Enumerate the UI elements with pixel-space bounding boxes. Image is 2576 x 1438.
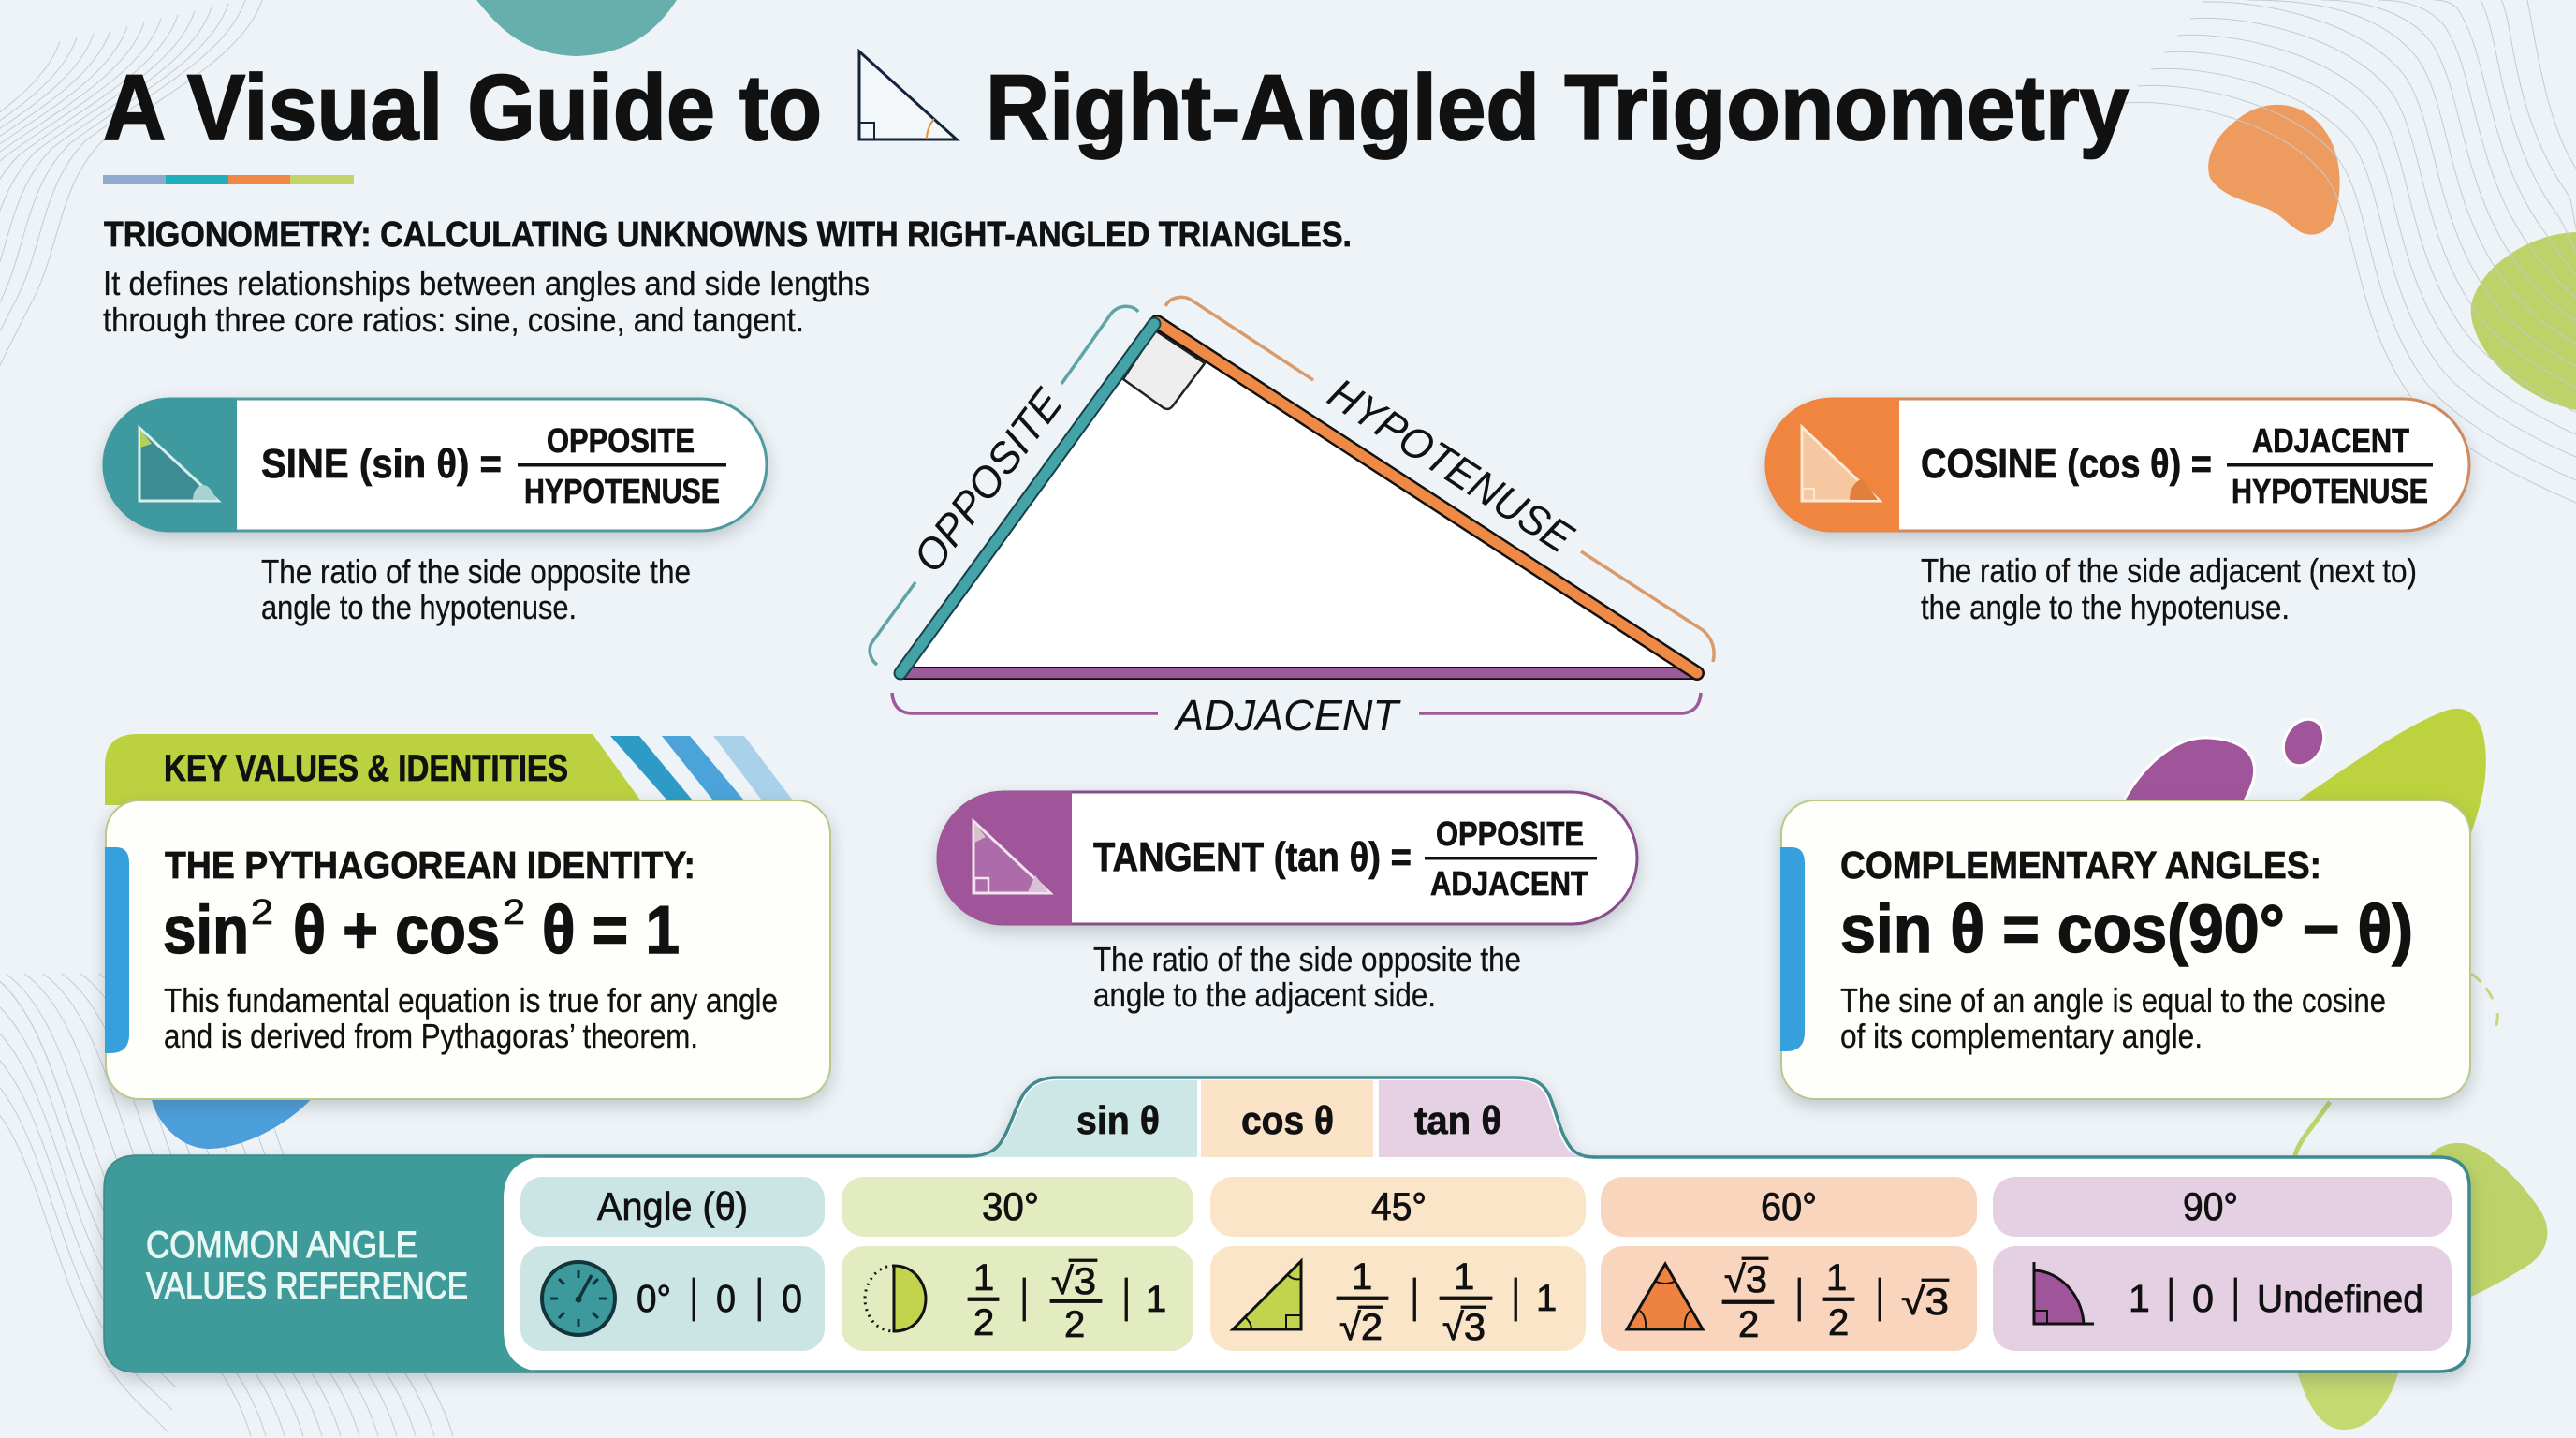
values: 1	[1352, 1256, 1372, 1298]
values: 0	[716, 1277, 736, 1320]
title: A Visual Guide to	[103, 55, 822, 159]
label: opposite: OPPOSITE	[903, 378, 1073, 580]
values: √3	[1051, 1261, 1096, 1302]
sine pill	[102, 398, 767, 532]
tab: cos	[1201, 1080, 1373, 1157]
values: 2	[1064, 1304, 1085, 1345]
values: 0	[782, 1277, 802, 1320]
values	[637, 1277, 802, 1321]
tab: sin	[978, 1080, 1197, 1157]
values: √2	[1339, 1307, 1383, 1348]
sine formula	[261, 421, 726, 510]
identity equation: θ + cos	[293, 893, 500, 968]
values: 2	[1828, 1302, 1849, 1343]
values	[968, 1257, 1166, 1345]
values	[1722, 1257, 1949, 1345]
complementary description: The sine of an angle is equal to the cosine	[1840, 981, 2386, 1020]
complementary description	[1840, 981, 2386, 1055]
column: angle 60: 60°	[1761, 1184, 1817, 1228]
ratio tabs	[978, 1080, 1587, 1157]
title colour bar	[103, 175, 354, 184]
cosine formula: HYPOTENUSE	[2232, 472, 2428, 510]
values: 1	[973, 1257, 994, 1299]
header tab	[105, 734, 644, 824]
tab: sin: sin θ	[1076, 1098, 1160, 1142]
complementary description: of its complementary angle.	[1840, 1017, 2203, 1055]
icon: half circle	[865, 1266, 926, 1331]
values: 0	[2192, 1277, 2214, 1320]
icon: gauge	[542, 1262, 615, 1335]
blue blob under identity card	[151, 1095, 315, 1149]
bracket: hypotenuse	[1165, 297, 1714, 662]
identity heading: THE PYTHAGOREAN IDENTITY:	[165, 844, 695, 887]
sine description: The ratio of the side opposite the	[261, 552, 691, 591]
label: hypotenuse: HYPOTENUSE	[1320, 368, 1583, 563]
values: 2	[973, 1302, 994, 1343]
icon: quarter circle	[2034, 1262, 2094, 1324]
values: Undefined	[2257, 1277, 2423, 1320]
sine formula: SINE (sin θ) =	[261, 441, 502, 487]
column: angle 30	[842, 1177, 1193, 1351]
column: angle 45: 45°	[1371, 1184, 1427, 1228]
values: 1	[2129, 1277, 2150, 1320]
icon: tangent triangle	[973, 821, 1050, 893]
triangle	[900, 322, 1697, 673]
cosine description: the angle to the hypotenuse.	[1921, 588, 2290, 626]
bracket: adjacent	[892, 693, 1701, 713]
icon: 45 degree triangle	[1233, 1261, 1301, 1329]
sine formula: HYPOTENUSE	[524, 472, 720, 510]
panel: cosine	[1764, 398, 2469, 626]
teal title block	[105, 1156, 543, 1372]
panel: common angle values table	[105, 1078, 2469, 1372]
complementary equation: sin θ = cos(90° − θ)	[1840, 892, 2413, 967]
column: angle 60	[1601, 1177, 1977, 1351]
tab: tan	[1379, 1080, 1587, 1157]
sine description	[261, 552, 691, 626]
column: angle 45	[1210, 1177, 1586, 1351]
intro text: It defines relationships between angles and side lengths	[103, 264, 870, 302]
cosine description	[1921, 551, 2417, 626]
column: angle 90: 90°	[2183, 1184, 2238, 1228]
cosine pill	[1764, 398, 2469, 532]
values: 1	[1536, 1278, 1557, 1319]
header text: KEY VALUES & IDENTITIES	[164, 748, 568, 789]
icon: sine triangle	[139, 428, 218, 501]
identity description: This fundamental equation is true for any angle	[164, 981, 778, 1020]
values: 0°	[637, 1277, 671, 1320]
values: √3	[1901, 1282, 1949, 1323]
table title: VALUES REFERENCE	[146, 1266, 468, 1307]
icon: title right triangle	[859, 51, 957, 139]
column: angle 90	[1993, 1177, 2452, 1351]
tangent formula: TANGENT (tan θ) =	[1093, 834, 1412, 880]
identity equation	[163, 893, 680, 968]
identity equation: sin	[163, 893, 249, 968]
panel: tangent	[936, 791, 1637, 1014]
column: angle 0: Angle (θ)	[597, 1184, 748, 1228]
bracket: opposite	[870, 306, 1138, 665]
cosine formula: COSINE (cos θ) =	[1921, 441, 2212, 487]
values: √3	[1724, 1259, 1767, 1300]
values: 1	[1826, 1257, 1847, 1299]
column: angle 30: 30°	[982, 1184, 1039, 1228]
blue tab	[1780, 847, 1805, 1051]
central triangle diagram	[870, 297, 1714, 740]
label: adjacent: ADJACENT	[1173, 691, 1401, 740]
values: 1	[1146, 1279, 1166, 1320]
sine description: angle to the hypotenuse.	[261, 588, 577, 626]
tangent formula	[1093, 814, 1597, 902]
title	[103, 51, 2129, 159]
panel: sine	[102, 398, 767, 626]
values	[2129, 1277, 2423, 1321]
subtitle: TRIGONOMETRY: CALCULATING UNKNOWNS WITH RIGHT-ANGLED TRIANGLES.	[104, 215, 1352, 255]
tangent pill	[936, 791, 1637, 925]
tangent description	[1093, 940, 1521, 1014]
cosine description: The ratio of the side adjacent (next to)	[1921, 551, 2417, 590]
identity description: and is derived from Pythagoras’ theorem.	[164, 1017, 698, 1055]
identity equation: 2	[251, 893, 273, 932]
title: Right-Angled Trigonometry	[986, 55, 2129, 159]
table frame with tabs	[105, 1078, 2469, 1372]
intro text	[103, 264, 870, 339]
identity equation: 2	[503, 893, 525, 932]
column: angle 0	[520, 1177, 825, 1351]
tab: tan: tan θ	[1414, 1098, 1501, 1142]
icon: cosine triangle	[1802, 427, 1880, 501]
sine formula: OPPOSITE	[547, 421, 695, 460]
identity card	[106, 800, 830, 1099]
cosine formula	[1921, 421, 2433, 510]
header stripes	[610, 736, 793, 800]
complementary heading: COMPLEMENTARY ANGLES:	[1840, 844, 2321, 887]
tangent description: The ratio of the side opposite the	[1093, 940, 1521, 978]
tangent description: angle to the adjacent side.	[1093, 976, 1436, 1014]
blue tab	[105, 847, 129, 1053]
panel: complementary angles	[1780, 800, 2470, 1099]
table title: COMMON ANGLE	[146, 1225, 417, 1266]
tangent formula: OPPOSITE	[1436, 814, 1584, 853]
values	[1337, 1256, 1557, 1348]
intro text: through three core ratios: sine, cosine, and tangent.	[103, 301, 804, 339]
table title	[146, 1225, 468, 1307]
tangent formula: ADJACENT	[1430, 864, 1588, 902]
values: 1	[1454, 1256, 1474, 1298]
values: √3	[1442, 1307, 1486, 1348]
icon: equilateral triangle	[1627, 1264, 1703, 1329]
identity equation: θ = 1	[542, 893, 680, 968]
cosine formula: ADJACENT	[2252, 421, 2409, 460]
identity description	[164, 981, 778, 1055]
panel: key values and identities	[105, 734, 830, 1099]
tab: cos: cos θ	[1241, 1098, 1334, 1142]
values: 2	[1738, 1304, 1759, 1345]
complementary card	[1781, 800, 2470, 1099]
